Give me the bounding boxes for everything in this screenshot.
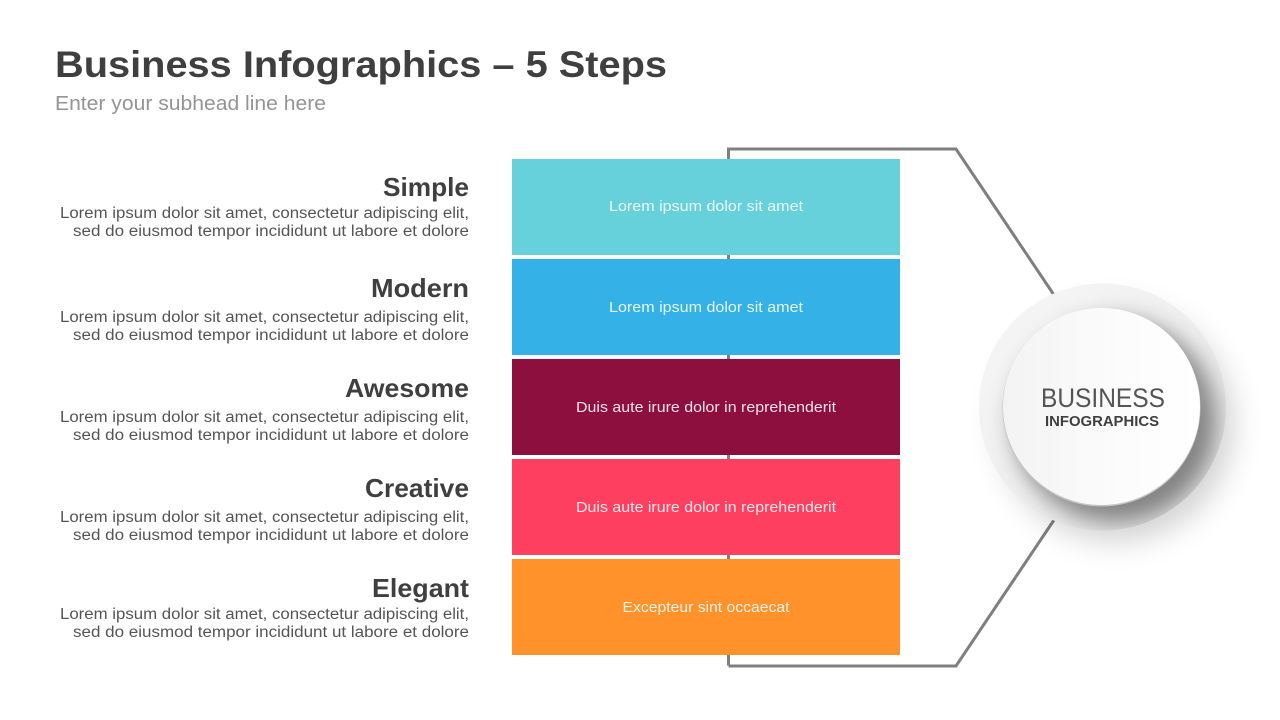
text block: Simple: sed do eiusmod tempor incididunt ut labore et dolore <box>73 223 469 240</box>
step 2 bar: Modern: Lorem ipsum dolor sit amet <box>609 300 803 316</box>
text block: Creative: Creative <box>365 473 469 503</box>
step 3 bar: Awesome <box>512 359 900 455</box>
text block: Awesome: Lorem ipsum dolor sit amet, consectetur adipiscing elit, <box>60 409 469 426</box>
step 5 bar: Elegant <box>512 559 900 655</box>
connector bracket <box>728 149 1054 666</box>
text block: Simple: Simple <box>383 172 469 202</box>
text block: Awesome <box>60 373 469 444</box>
step 4 bar: Creative: Duis aute irure dolor in reprehenderit <box>576 500 836 516</box>
text block: Elegant <box>60 573 469 641</box>
text block: Elegant: Lorem ipsum dolor sit amet, consectetur adipiscing elit, <box>60 606 469 623</box>
text block: Modern: Lorem ipsum dolor sit amet, consectetur adipiscing elit, <box>60 309 469 326</box>
text block: Creative: sed do eiusmod tempor incididunt ut labore et dolore <box>73 527 469 544</box>
text block: Modern <box>60 273 469 344</box>
text block: Simple: Lorem ipsum dolor sit amet, consectetur adipiscing elit, <box>60 205 469 222</box>
title: Business Infographics – 5 Steps <box>55 44 667 85</box>
step 4 bar: Creative <box>512 459 900 555</box>
center circle badge <box>979 284 1234 542</box>
text block: Creative <box>60 473 469 544</box>
badge label: INFOGRAPHICS <box>1045 414 1159 430</box>
subtitle: Enter your subhead line here <box>55 93 326 115</box>
text block: Elegant: sed do eiusmod tempor incididunt ut labore et dolore <box>73 624 469 641</box>
text block: Simple <box>60 172 469 240</box>
step 1 bar: Simple: Lorem ipsum dolor sit amet <box>609 199 803 215</box>
text block: Awesome: sed do eiusmod tempor incididunt ut labore et dolore <box>73 427 469 444</box>
step 2 bar: Modern <box>512 259 900 355</box>
text block: Modern: Modern <box>371 273 469 303</box>
text block: Creative: Lorem ipsum dolor sit amet, consectetur adipiscing elit, <box>60 509 469 526</box>
badge label: BUSINESS <box>1041 383 1165 413</box>
text block: Elegant: Elegant <box>372 573 469 603</box>
badge label <box>1041 383 1165 430</box>
step 1 bar: Simple <box>512 159 900 255</box>
step 3 bar: Awesome: Duis aute irure dolor in reprehenderit <box>576 400 836 416</box>
text block: Awesome: Awesome <box>345 373 469 403</box>
step 5 bar: Elegant: Excepteur sint occaecat <box>622 600 790 616</box>
text block: Modern: sed do eiusmod tempor incididunt ut labore et dolore <box>73 327 469 344</box>
